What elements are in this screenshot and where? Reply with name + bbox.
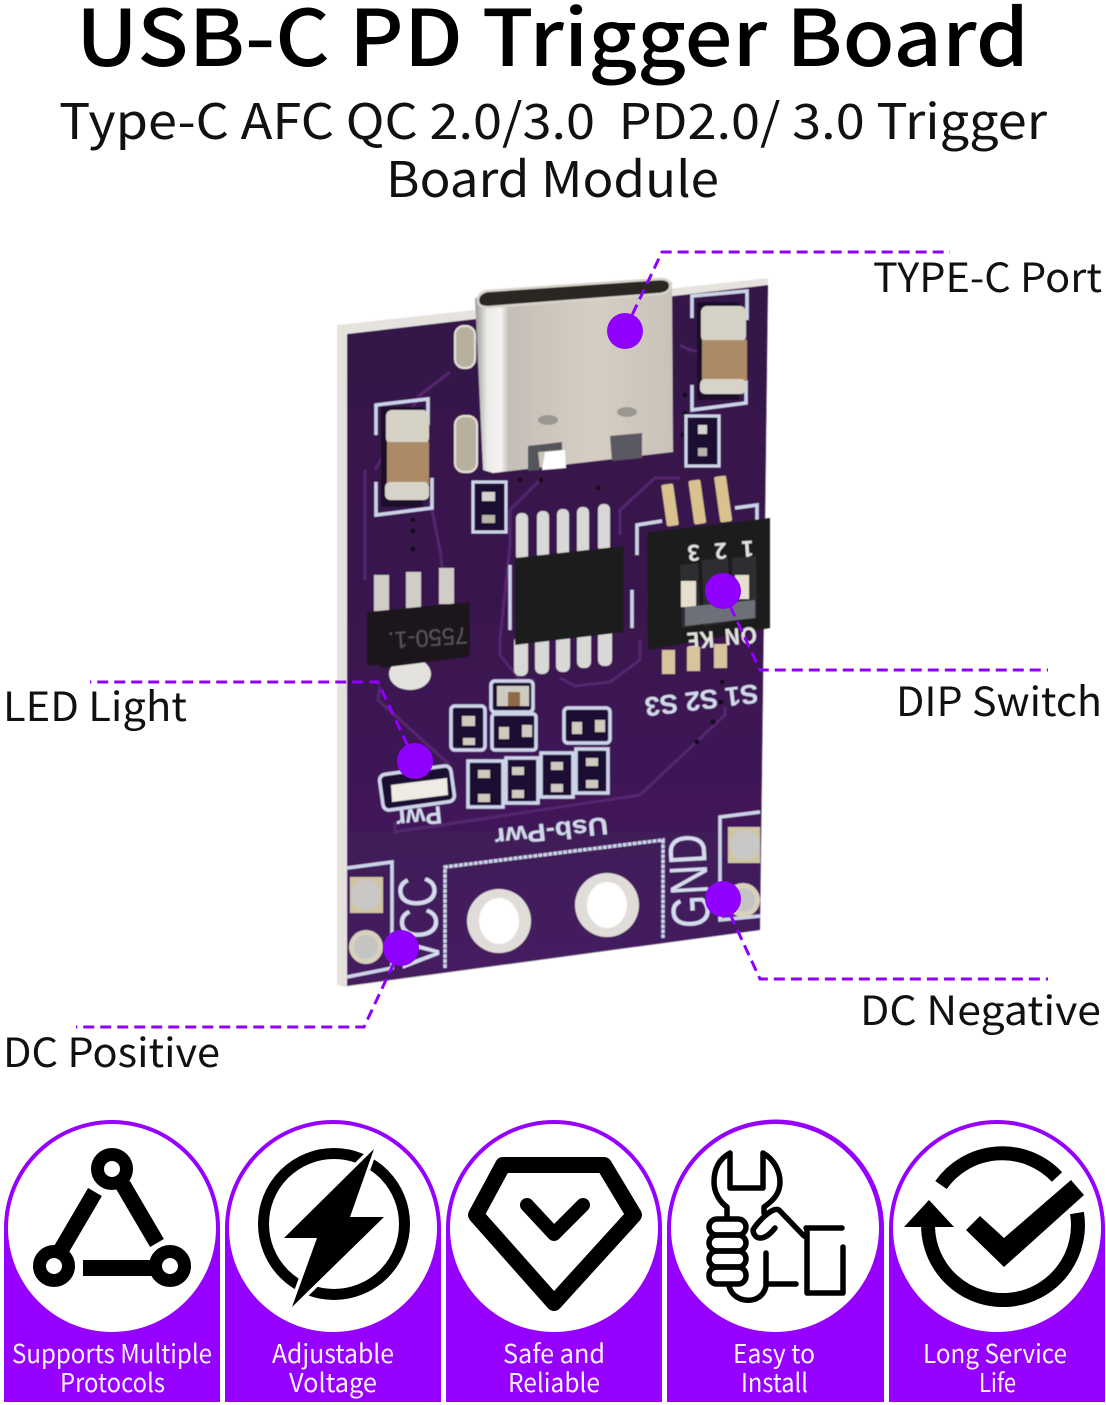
pads: VCC [347, 862, 392, 977]
icon: diamond with check [476, 1165, 634, 1303]
caption: Voltage [289, 1363, 377, 1400]
callout: DC Negative [705, 881, 1101, 1037]
caption: Easy to [733, 1334, 815, 1371]
icon: hand with wrench [709, 1153, 843, 1300]
panel: Safe and Reliable [446, 1120, 662, 1402]
board edge [337, 278, 768, 987]
caption [12, 1334, 212, 1400]
caption: Adjustable [272, 1334, 394, 1371]
component: SOT-223 regulator [367, 568, 470, 690]
caption: Reliable [508, 1363, 600, 1400]
component: SOIC chip [510, 504, 632, 676]
caption: Long Service [923, 1334, 1067, 1371]
component: power LED [379, 765, 455, 833]
component: power LED: Pwr [394, 800, 443, 833]
caption: Protocols [60, 1363, 165, 1400]
subtitle: Type-C AFC QC 2.0/3.0 PD2.0/ 3.0 Trigger [59, 83, 1048, 154]
callout: DC Positive: DC Positive [3, 1021, 220, 1079]
silkscreen: VCC: VCC [387, 874, 452, 970]
component: small pads top [473, 416, 719, 532]
icon: triangle network [40, 1154, 184, 1280]
caption [923, 1334, 1067, 1400]
screw terminal outline and holes [445, 840, 663, 968]
caption: Supports Multiple [12, 1334, 212, 1371]
caption: Life [979, 1363, 1016, 1400]
product photo: trigger board [337, 278, 770, 987]
board surface [347, 285, 768, 986]
small SMD parts [451, 681, 610, 807]
callout: TYPE-C Port: TYPE-C Port [873, 246, 1102, 304]
component: DIP switch: 3 [686, 538, 701, 570]
caption: Install [741, 1363, 808, 1400]
callout: DIP Switch: DIP Switch [896, 670, 1102, 728]
component: capacitor left [376, 399, 432, 515]
panel: Easy to Install [667, 1120, 884, 1402]
subtitle [59, 83, 1048, 212]
callout: TYPE-C Port [607, 246, 1102, 349]
component: DIP switch: 2 [713, 536, 728, 568]
copper traces [365, 345, 745, 832]
callout: DC Negative: DC Negative [860, 979, 1101, 1037]
caption: Safe and [503, 1334, 605, 1371]
silkscreen: S1 S2 S3: S1 S2 S3 [643, 678, 760, 722]
panel: Supports Multiple Protocols [4, 1120, 220, 1402]
callout: LED Light: LED Light [3, 675, 187, 733]
callout: LED Light [3, 675, 433, 779]
caption [272, 1334, 394, 1400]
component: solder tabs [455, 326, 477, 472]
component: DIP switch: KE [685, 624, 716, 658]
caption [733, 1334, 815, 1400]
component: DIP switch: ON [723, 620, 758, 654]
callout: DIP Switch [705, 573, 1102, 728]
silkscreen: GND: GND [657, 833, 722, 930]
icon: lightning bolt in ring [264, 1149, 404, 1307]
component: USB Type-C connector [475, 279, 673, 473]
callout: DC Positive [3, 930, 419, 1079]
panel: Long Service Life [889, 1120, 1105, 1402]
silkscreen: Usb-Pwr: Usb-Pwr [493, 811, 609, 851]
subtitle: Board Module [386, 141, 719, 212]
icon: cycle with check [904, 1153, 1084, 1300]
component: DIP switch: 1 [740, 534, 755, 566]
panel: Adjustable Voltage [225, 1120, 441, 1402]
component: DIP switch [637, 475, 770, 674]
component: SOT-223 regulator: 7550-1. [387, 621, 469, 654]
component: capacitor right [692, 291, 747, 410]
pads: GND [720, 812, 760, 920]
caption [503, 1334, 605, 1400]
vias [410, 392, 724, 744]
